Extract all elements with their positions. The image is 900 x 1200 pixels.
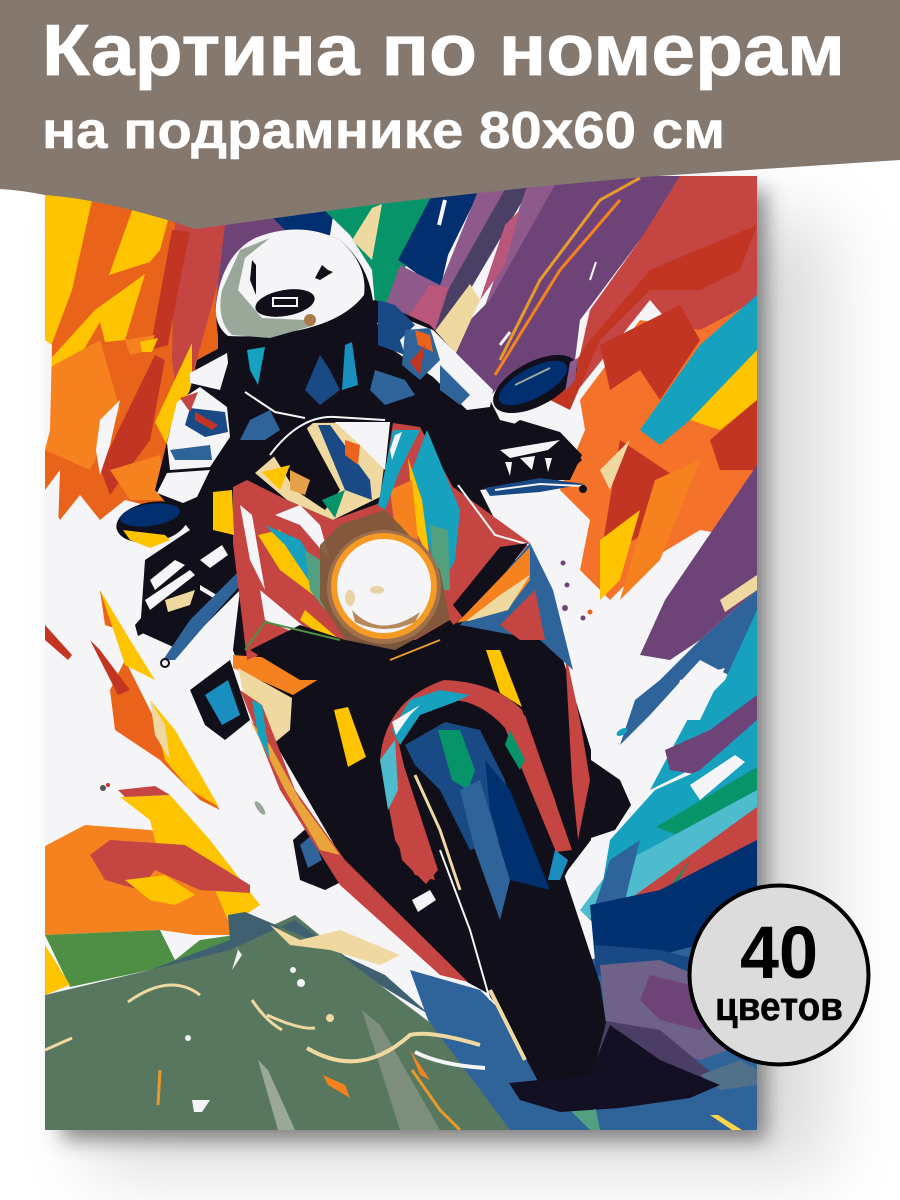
header banner bbox=[0, 0, 900, 229]
ground shadow bbox=[509, 1025, 720, 1112]
right mirror bbox=[493, 355, 578, 413]
title: Картина по номерам bbox=[42, 11, 845, 91]
windscreen bbox=[255, 417, 390, 520]
background: top colour stripes bbox=[215, 176, 680, 394]
background: right red and orange strokes bbox=[550, 176, 757, 935]
helmet bbox=[216, 229, 378, 418]
subtitle: на подрамнике 80х60 см bbox=[42, 102, 725, 160]
front fender bbox=[380, 680, 572, 912]
front tyre bbox=[398, 713, 606, 1085]
background: left splash bbox=[45, 590, 267, 995]
side fairing right bbox=[453, 543, 573, 670]
canvas drop shadow bbox=[62, 190, 830, 1170]
front fairing bbox=[213, 423, 530, 660]
headlight bbox=[320, 510, 450, 650]
left mirror bbox=[116, 501, 186, 548]
lower fairing bbox=[233, 650, 590, 982]
rider left arm bbox=[157, 353, 280, 503]
road and ground bbox=[45, 912, 660, 1130]
right glove and brake lever bbox=[485, 420, 587, 496]
badge label: цветов bbox=[715, 985, 843, 1029]
painting: motorcycle rider bbox=[45, 176, 757, 1130]
badge number: 40 bbox=[740, 911, 818, 994]
background: left orange strokes bbox=[45, 195, 230, 520]
badge: 40 colours bbox=[690, 886, 868, 1064]
background: bottom right ground bbox=[590, 840, 757, 1130]
rider right arm bbox=[370, 300, 493, 410]
lower headlight shadow bbox=[245, 620, 470, 680]
motorcycle and rider silhouette bbox=[140, 300, 631, 1000]
left glove and brake lever bbox=[135, 545, 245, 667]
